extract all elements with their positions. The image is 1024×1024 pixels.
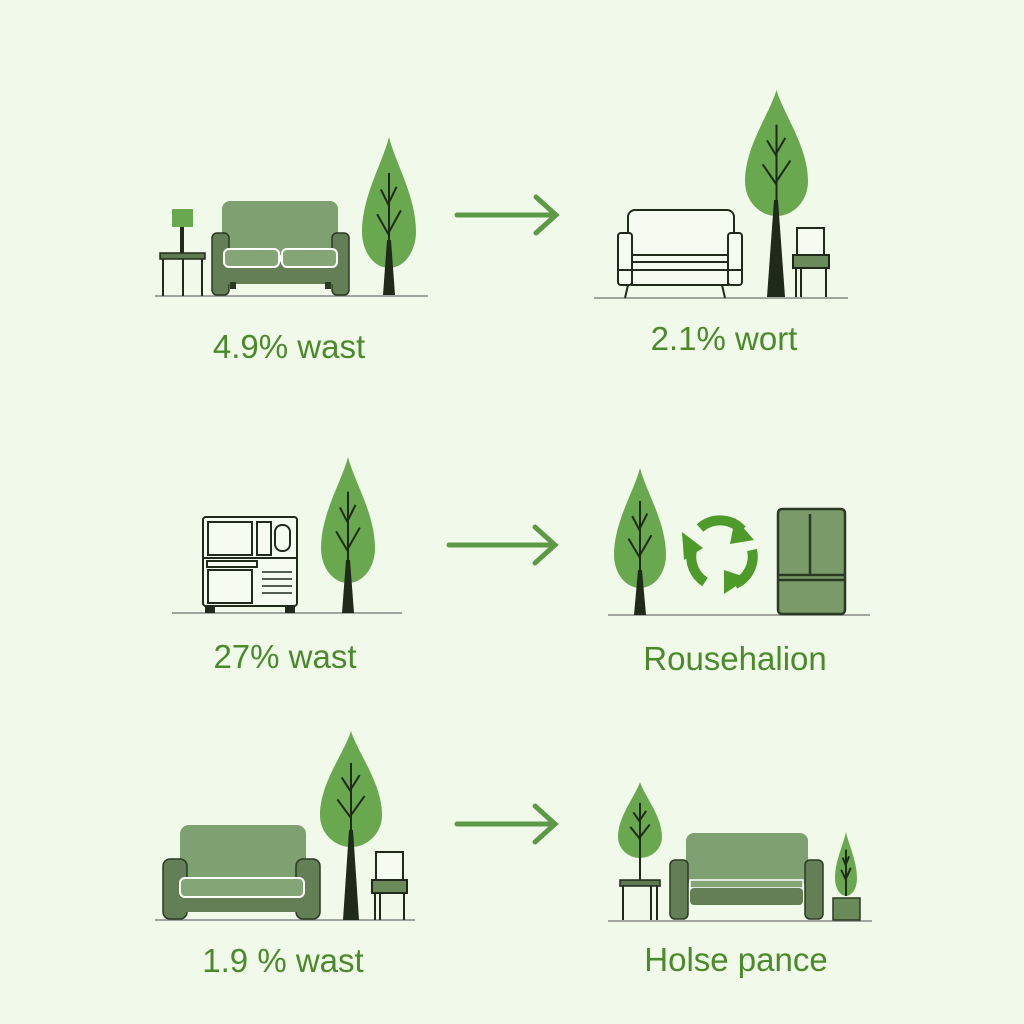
- icon: recycle symbol: [682, 518, 754, 594]
- icon: fridge: [778, 509, 845, 614]
- label: 1.9 % wast: 1.9 % wast: [202, 942, 364, 979]
- icon: sofa: [163, 825, 320, 919]
- icon: table with plant: [618, 782, 662, 920]
- icon: sofa: [670, 833, 823, 919]
- icon: outline sofa: [618, 210, 742, 298]
- icon: tree: [614, 468, 666, 615]
- icon: tree: [362, 137, 416, 295]
- panel: row 3 before: [163, 731, 407, 920]
- icon: tree: [321, 457, 375, 613]
- icon: sofa: [212, 201, 349, 295]
- panel: row 3 after: [618, 782, 860, 920]
- icon: tree: [745, 90, 808, 297]
- panel: row 2 before: [203, 457, 375, 613]
- label: 27% wast: 27% wast: [213, 638, 357, 675]
- arrow row 2: [449, 527, 555, 563]
- label: Holse pance: Holse pance: [644, 941, 828, 978]
- icon: tree: [320, 731, 382, 920]
- panel: row 1 after: [618, 90, 829, 298]
- label: 4.9% wast: 4.9% wast: [213, 328, 365, 365]
- arrow row 1: [457, 197, 556, 233]
- panel: row 2 after: [614, 468, 845, 615]
- icon: potted plant: [833, 832, 860, 920]
- label: 2.1% wort: 2.1% wort: [651, 320, 797, 357]
- icon: appliance: [203, 517, 297, 612]
- icon: chair: [793, 228, 829, 297]
- panel: row 1 before: [160, 137, 416, 296]
- arrow row 3: [457, 806, 555, 842]
- label: Rousehalion: Rousehalion: [643, 640, 827, 677]
- icon: chair: [372, 852, 407, 920]
- icon: side table with lamp: [160, 209, 205, 296]
